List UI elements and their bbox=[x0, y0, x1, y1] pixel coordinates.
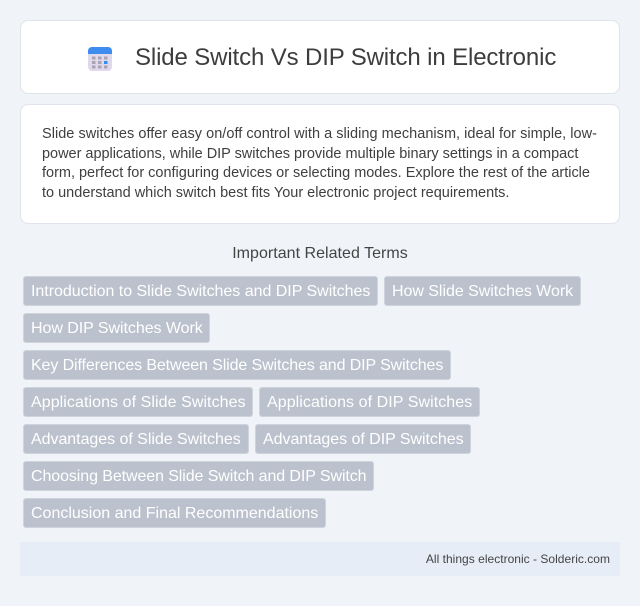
tag: Advantages of Slide Switches bbox=[31, 431, 241, 448]
tag: Advantages of DIP Switches bbox=[263, 431, 464, 448]
tag bbox=[23, 276, 378, 306]
tag bbox=[23, 387, 253, 417]
tag: Key Differences Between Slide Switches and DIP Switches bbox=[31, 357, 443, 374]
icon: calendar grid bbox=[88, 47, 112, 71]
tag: Applications of DIP Switches bbox=[267, 394, 472, 411]
header card bbox=[20, 20, 620, 94]
tag: Applications of Slide Switches bbox=[31, 394, 246, 411]
tag bbox=[23, 461, 374, 491]
intro text panel bbox=[20, 104, 620, 224]
intro paragraph: form, perfect for configuring devices or selecting modes. Explore the rest of the article bbox=[42, 165, 590, 181]
tag: Choosing Between Slide Switch and DIP Switch bbox=[31, 468, 366, 485]
footer credit: All things electronic - Solderic.com bbox=[426, 552, 610, 566]
tag bbox=[23, 350, 451, 380]
tag bbox=[23, 313, 210, 343]
intro paragraph: to understand which switch best fits Your electronic project requirements. bbox=[42, 185, 509, 201]
title: Slide Switch Vs DIP Switch in Electronic bbox=[135, 44, 556, 71]
footer bar bbox=[20, 542, 620, 576]
intro paragraph bbox=[42, 126, 597, 201]
tag bbox=[384, 276, 581, 306]
tag bbox=[23, 498, 326, 528]
related terms tags bbox=[23, 276, 581, 528]
tag bbox=[23, 424, 249, 454]
tag: How Slide Switches Work bbox=[392, 283, 573, 300]
tag bbox=[255, 424, 471, 454]
intro paragraph: power applications, while DIP switches provide multiple binary settings in a compact bbox=[42, 146, 578, 162]
related terms heading: Important Related Terms bbox=[232, 245, 408, 262]
tag: Conclusion and Final Recommendations bbox=[31, 505, 318, 522]
tag bbox=[259, 387, 480, 417]
intro paragraph: Slide switches offer easy on/off control with a sliding mechanism, ideal for simple, low- bbox=[42, 126, 597, 142]
tag: How DIP Switches Work bbox=[31, 320, 203, 337]
tag: Introduction to Slide Switches and DIP Switches bbox=[31, 283, 370, 300]
